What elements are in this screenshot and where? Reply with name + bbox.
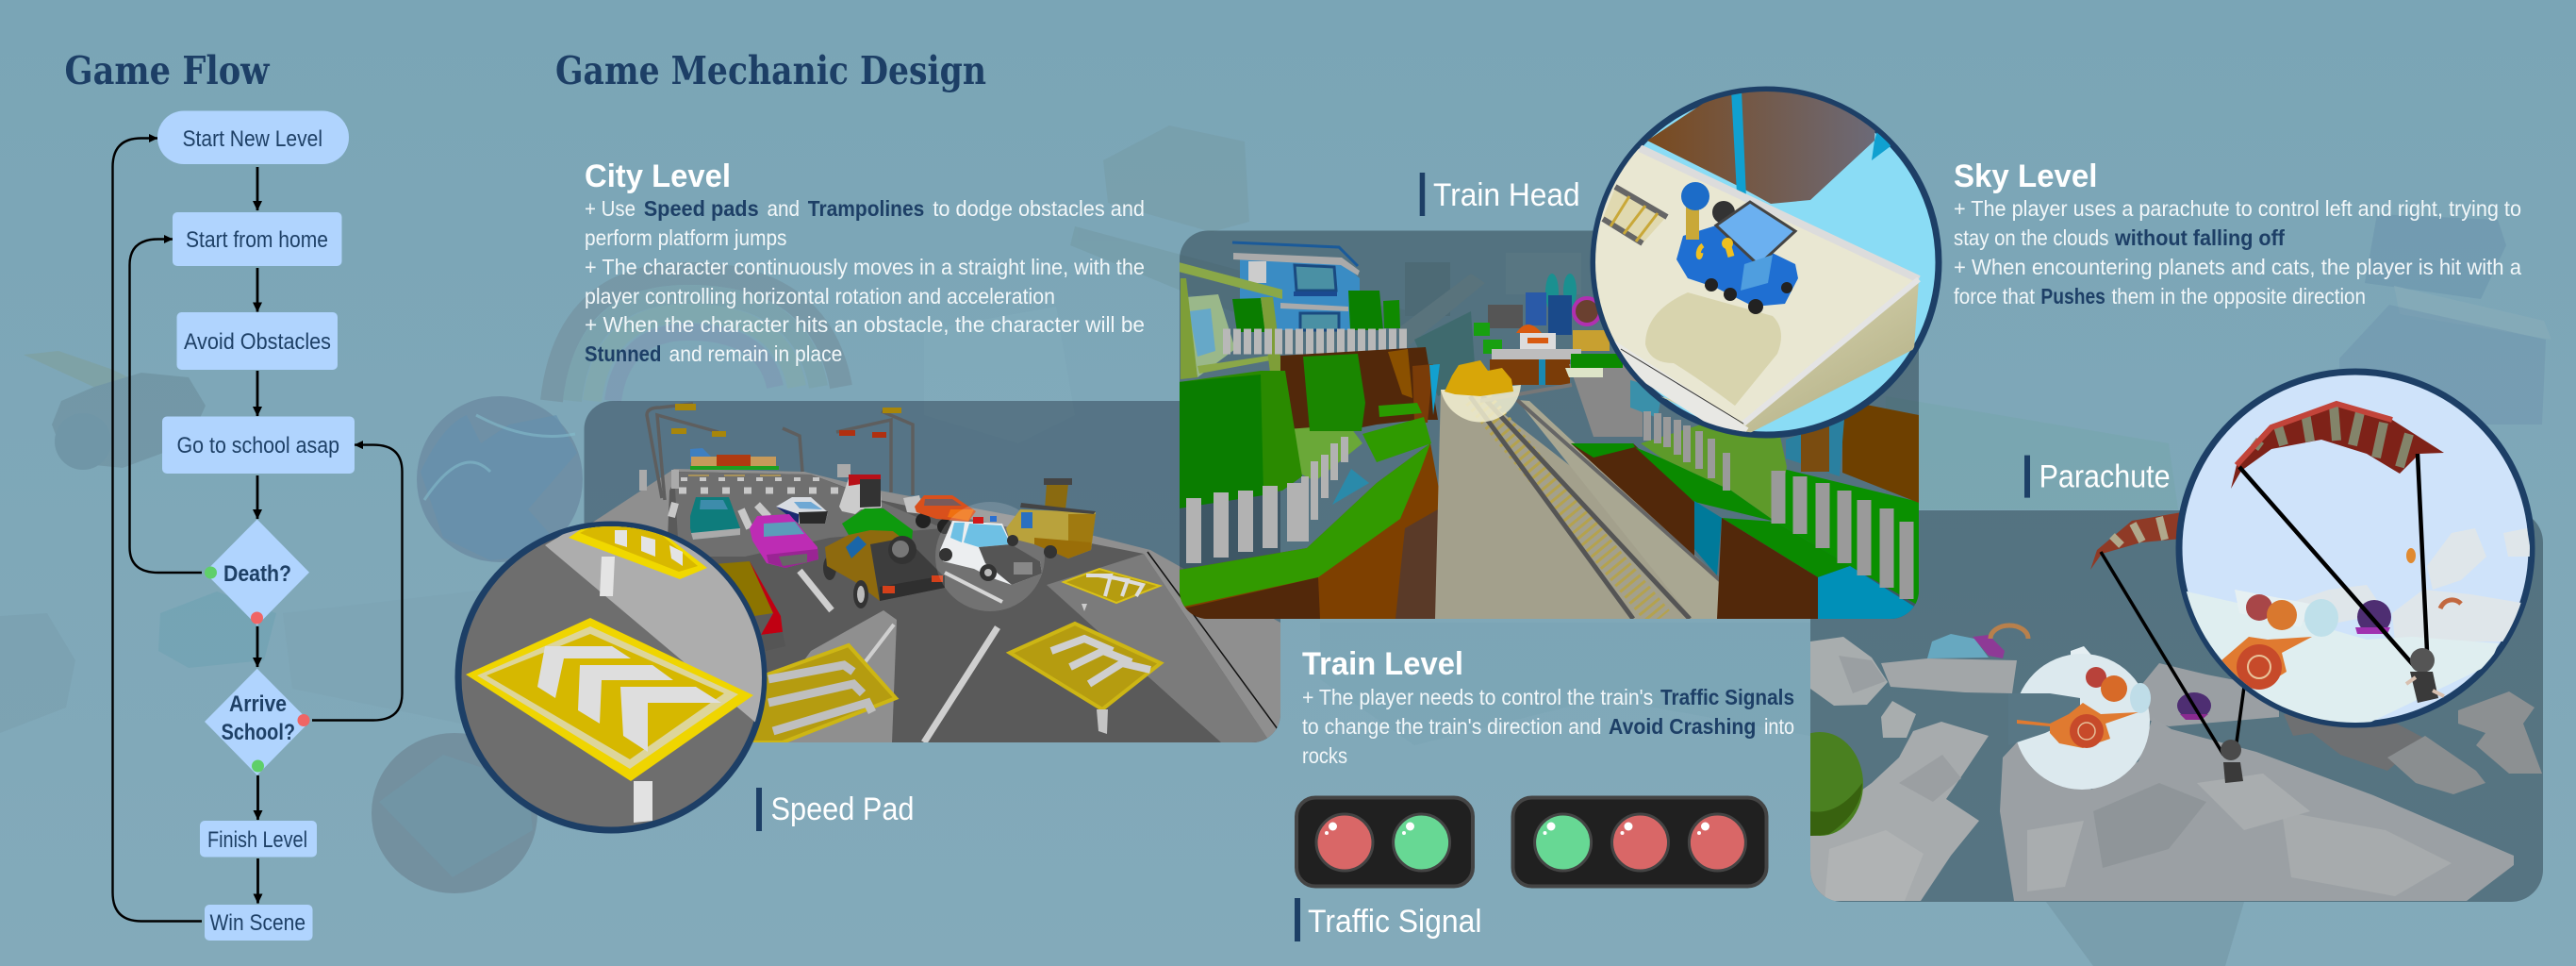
text block: sky level: Pushes <box>2040 284 2105 308</box>
snow platform <box>2178 590 2499 736</box>
green car <box>842 508 913 541</box>
police car <box>939 516 1042 585</box>
text block: train level: Avoid Crashing <box>1609 714 1756 739</box>
gray shop <box>1565 354 1662 437</box>
node: avoid obstacles <box>177 312 338 370</box>
front-left cliff <box>1180 443 1443 619</box>
node: start new level <box>157 111 349 164</box>
decision: death: Death? <box>223 561 291 587</box>
ghost city behind <box>1395 253 1581 396</box>
right building <box>1786 400 1919 503</box>
label: train head: Train Head <box>1433 177 1580 213</box>
ghost cloud masses <box>924 307 1075 443</box>
distant clouds <box>2287 528 2532 641</box>
text block: train level: Train Level <box>1302 646 1463 682</box>
side lawn <box>1287 425 1362 481</box>
red light <box>1689 814 1745 871</box>
label: parachute <box>2024 456 2171 498</box>
magenta car <box>750 514 818 568</box>
label: speed pad: Speed Pad <box>771 791 915 827</box>
rail segment <box>1603 187 1667 243</box>
small character <box>2221 740 2243 783</box>
text block: city level: + Use <box>585 196 636 221</box>
porch <box>1179 262 1282 379</box>
node: go to school asap: Go to school asap <box>177 433 339 458</box>
text block: city level: to dodge obstacles and <box>933 196 1145 221</box>
text block: city level: + When the character hits an obstacle, the character will be <box>585 312 1145 337</box>
school far away <box>690 455 779 470</box>
cloud platforms <box>1810 637 2542 901</box>
back fence <box>1223 328 1409 355</box>
chevrons <box>537 646 631 698</box>
text block: city level: Trampolines <box>808 196 924 221</box>
text block: city level: and <box>768 196 800 221</box>
text block: train level <box>1302 646 1794 768</box>
decision: arrive school <box>205 669 309 775</box>
text block: sky level: stay on the clouds <box>1954 225 2108 250</box>
node: win scene: Win Scene <box>209 910 305 936</box>
text block: sky level: without falling off <box>2114 225 2285 250</box>
ghost plane <box>24 351 206 470</box>
panel: train level screenshot <box>1179 230 1919 619</box>
street scene <box>585 404 1280 742</box>
dark car <box>776 497 828 524</box>
lane markings <box>800 571 1002 742</box>
label: traffic signal: Traffic Signal <box>1308 904 1482 940</box>
node: win scene <box>205 905 313 941</box>
red light <box>1612 814 1669 871</box>
yellow food van <box>1006 478 1096 558</box>
decision: arrive school: Arrive <box>229 691 287 717</box>
panel backdrop <box>1810 510 2543 902</box>
text block: city level: and remain in place <box>669 341 842 366</box>
brown cliff <box>1280 347 1440 443</box>
plane <box>2221 637 2312 690</box>
text block: train level: to change the train's direction and <box>1302 714 1602 739</box>
text block: city level: player controlling horizontal rotation and acceleration <box>585 284 1055 308</box>
sunlit road wedge <box>545 509 783 745</box>
decision: death <box>205 519 309 625</box>
text block: city level <box>585 158 1145 366</box>
highlight circle <box>2008 654 2150 790</box>
text block: city level: + The character continuously moves in a straight line, with the <box>585 255 1145 279</box>
balloon <box>2406 548 2416 563</box>
traffic signal: three lights <box>1512 798 1767 887</box>
text block: train level: into <box>1764 714 1794 739</box>
ghost tower right <box>2339 214 2551 425</box>
front-left fence <box>1194 437 1345 563</box>
cars <box>690 475 1096 651</box>
node: start from home <box>173 212 341 266</box>
title: game mechanic design: Game Mechanic Design <box>555 48 986 93</box>
small blue water <box>1332 469 1369 505</box>
parachute canopy <box>2231 404 2444 489</box>
text block: train level: rocks <box>1302 743 1347 768</box>
far dome and rainbow <box>1927 625 2096 660</box>
title: game flow: Game Flow <box>64 48 271 93</box>
red truck <box>839 475 882 514</box>
far left cloud <box>1810 637 1888 706</box>
big tree cube <box>1179 371 1302 508</box>
blue building <box>1232 242 1360 330</box>
far platform <box>1881 658 2017 693</box>
green light <box>1535 814 1592 871</box>
text block: sky level: + When encountering planets and cats, the player is hit with a <box>1954 255 2521 279</box>
main speed pad <box>466 618 753 781</box>
small planets <box>2086 667 2211 720</box>
highlight circle <box>1441 385 1521 422</box>
character <box>2406 648 2444 703</box>
panel: sky level screenshot <box>1776 510 2543 902</box>
text block: sky level: + The player uses a parachute to control left and right, trying to <box>1954 196 2521 221</box>
back trees <box>1232 291 1400 332</box>
connector: death back to start from home <box>130 240 202 573</box>
text block: sky level: force that <box>1954 284 2036 308</box>
pedestrians <box>639 464 850 491</box>
node: avoid obstacles: Avoid Obstacles <box>184 329 331 355</box>
text block: city level: City Level <box>585 158 731 194</box>
teal car <box>690 497 740 540</box>
far buildings <box>1474 274 1610 385</box>
text block: city level: Stunned <box>585 341 661 366</box>
crosswalk <box>671 479 844 528</box>
panel backdrop <box>1180 230 1919 619</box>
left cloud mass <box>1810 722 1989 901</box>
central cloud bumps <box>2138 663 2279 726</box>
red bus <box>718 561 783 635</box>
tree cube <box>1303 354 1365 431</box>
text block: sky level <box>1954 158 2521 308</box>
orange plane <box>2017 703 2138 748</box>
street lamps and signals <box>647 404 913 500</box>
magnifier circle: parachute <box>2178 372 2532 736</box>
panel: city level screenshot <box>585 401 1280 742</box>
suspension lines <box>2239 454 2427 669</box>
tracks and road <box>1435 385 1766 619</box>
right rocks <box>2458 691 2542 774</box>
green light <box>1394 814 1450 871</box>
right fences <box>1647 411 1907 599</box>
small parachute <box>2090 512 2244 755</box>
small lump <box>1881 701 1916 738</box>
planets <box>2246 594 2391 637</box>
platform top <box>1593 148 1919 424</box>
text block: city level: Speed pads <box>644 196 759 221</box>
ghost rainbow <box>552 274 841 401</box>
canyon wall <box>1647 85 1876 204</box>
text block: city level: perform platform jumps <box>585 225 786 250</box>
traffic signal: two lights <box>1296 798 1473 887</box>
ghost planet two <box>372 733 537 893</box>
flowchart <box>113 111 402 941</box>
golden rock <box>1445 360 1513 396</box>
speed pads on road <box>745 569 1161 742</box>
white car behind <box>903 495 920 513</box>
rainbow <box>2440 600 2461 608</box>
green balloon <box>1810 732 1863 836</box>
connector: not arrived back to go to school <box>312 445 402 721</box>
brown jeep <box>823 530 945 608</box>
node: finish level <box>200 821 317 857</box>
red light <box>1316 814 1373 871</box>
ghost planet one <box>417 396 583 562</box>
front cloud mass <box>2000 717 2514 901</box>
connectors <box>113 138 402 921</box>
panel backdrop <box>585 401 1280 742</box>
node: start new level: Start New Level <box>183 126 322 152</box>
text block: sky level: Sky Level <box>1954 158 2097 194</box>
light spot <box>935 502 1045 611</box>
node: start from home: Start from home <box>186 227 328 253</box>
dark rock cluster <box>2284 714 2425 771</box>
text block: sky level: them in the opposite direction <box>2112 284 2366 308</box>
label: parachute: Parachute <box>2039 459 2171 495</box>
text block: train level: + The player needs to control the train's <box>1302 685 1653 709</box>
top pad <box>569 524 707 579</box>
decision: arrive school: School? <box>222 720 295 745</box>
node: go to school asap <box>162 417 355 474</box>
magnifier circle: train head <box>1593 85 1939 436</box>
label: speed pad <box>756 788 915 831</box>
ghost building top <box>1070 125 1414 330</box>
platform side <box>1660 279 1919 435</box>
train shadow <box>1645 292 1781 406</box>
right side terrain <box>1571 415 1919 619</box>
orange car <box>915 495 976 534</box>
text block: train level: Traffic Signals <box>1660 685 1794 709</box>
connector: win scene back to start new level <box>113 138 202 921</box>
blue train <box>1676 182 1798 314</box>
post <box>634 781 652 823</box>
magnifier circle: speed pad <box>458 509 783 830</box>
arrows down <box>256 167 259 904</box>
node: finish level: Finish Level <box>207 827 307 853</box>
